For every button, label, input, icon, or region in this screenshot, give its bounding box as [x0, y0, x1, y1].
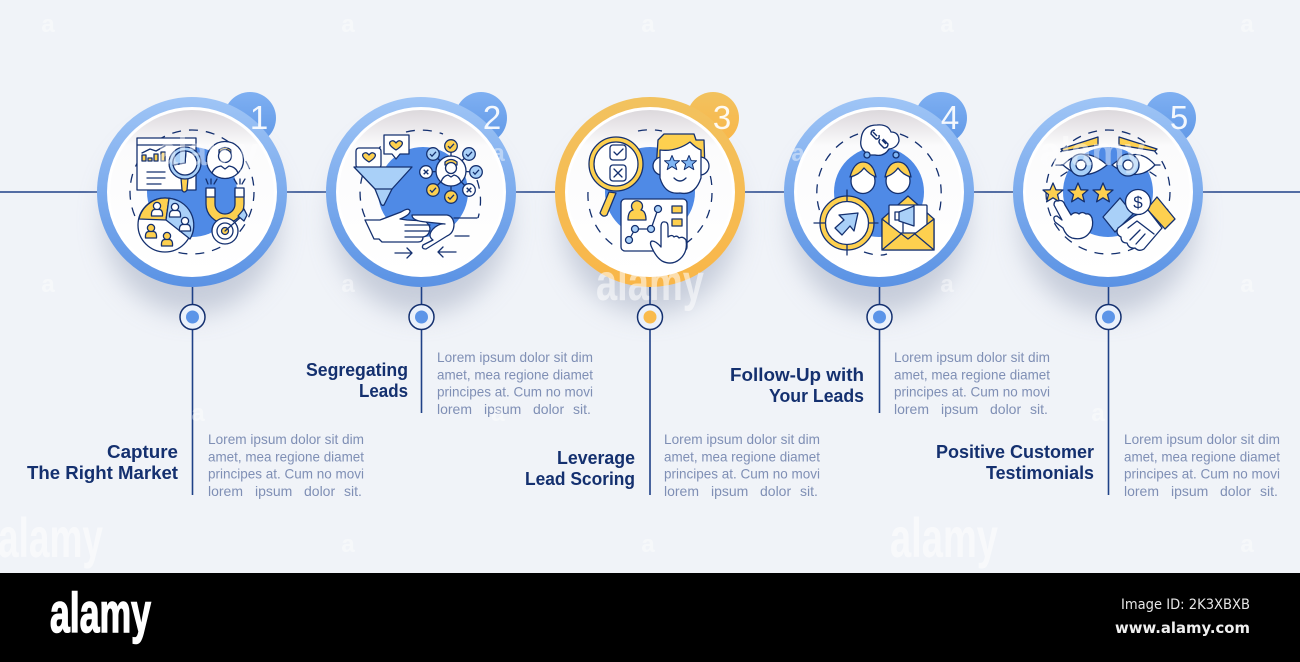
- number 1: 1: [250, 99, 268, 136]
- image id: Image ID: 2K3XBXB: [1121, 597, 1250, 613]
- text block: step 5: principes at. Cum no movi: [1124, 466, 1280, 482]
- heading: step 1: Capture: [107, 441, 178, 462]
- icon: lead scoring: [588, 130, 712, 263]
- watermarks: a: [1091, 400, 1105, 427]
- footer bar: [0, 573, 1300, 662]
- text block: step 1: lorem: [208, 483, 243, 499]
- watermarks: a: [1240, 271, 1254, 298]
- text block: step 4: ipsum: [941, 401, 978, 417]
- text block: step 5: amet, mea regione diamet: [1124, 448, 1280, 464]
- text block: step 5: [1124, 431, 1280, 499]
- panel: step 3 circle: [555, 92, 745, 314]
- heading: step 3: [525, 447, 635, 489]
- heading: step 4: Your Leads: [769, 385, 864, 406]
- text block: step 5: dolor: [1220, 483, 1251, 499]
- watermarks: a: [41, 11, 55, 38]
- heading: step 4: Follow-Up with: [730, 364, 864, 385]
- watermarks: alamy: [1040, 130, 1146, 174]
- text block: step 4: [894, 349, 1050, 417]
- watermarks: a: [41, 271, 55, 298]
- step 2 connector and node: [409, 287, 434, 413]
- heading: step 2: Leads: [359, 380, 408, 401]
- text block: step 2: dolor: [533, 401, 564, 417]
- text block: step 5: lorem: [1124, 483, 1159, 499]
- text block: step 3: [664, 431, 820, 499]
- watermarks: a: [491, 400, 505, 427]
- text block: step 3: sit.: [800, 483, 818, 499]
- watermarks: a: [341, 531, 355, 558]
- text block: step 5: ipsum: [1171, 483, 1208, 499]
- watermarks: a: [940, 271, 954, 298]
- text block: step 4: sit.: [1030, 401, 1048, 417]
- text block: step 2: Lorem ipsum dolor sit dim: [437, 349, 593, 365]
- heading: step 1: [27, 441, 178, 483]
- text block: step 2: ipsum: [484, 401, 521, 417]
- icon: market capture: [130, 130, 254, 254]
- text block: step 3: dolor: [760, 483, 791, 499]
- text block: step 3: lorem: [664, 483, 699, 499]
- watermarks: a: [940, 11, 954, 38]
- heading: step 3: Lead Scoring: [525, 468, 635, 489]
- panel: step 1 circle: [97, 92, 287, 314]
- number 4: 4: [941, 99, 959, 136]
- icon: follow-up: [814, 125, 941, 255]
- heading: step 4: [730, 364, 864, 406]
- text block: step 1: amet, mea regione diamet: [208, 448, 364, 464]
- watermarks: a: [1240, 531, 1254, 558]
- text block: step 3: ipsum: [711, 483, 748, 499]
- step 3 connector and node: [638, 287, 662, 495]
- watermarks: a: [641, 11, 655, 38]
- text block: step 3: Lorem ipsum dolor sit dim: [664, 431, 820, 447]
- step 5 connector and node: [1096, 287, 1121, 495]
- text block: step 1: Lorem ipsum dolor sit dim: [208, 431, 364, 447]
- panel: step 2 circle: [326, 92, 516, 314]
- watermarks: a: [341, 271, 355, 298]
- heading: step 2: Segregating: [306, 359, 408, 380]
- text block: step 4: principes at. Cum no movi: [894, 384, 1050, 400]
- icon: segregating leads: [354, 130, 482, 258]
- watermarks: alamy: [890, 506, 998, 569]
- text block: step 2: lorem: [437, 401, 472, 417]
- text block: step 5: Lorem ipsum dolor sit dim: [1124, 431, 1280, 447]
- text block: step 4: lorem: [894, 401, 929, 417]
- text block: step 4: dolor: [990, 401, 1021, 417]
- icon: testimonials: $: [1133, 193, 1143, 212]
- step 4 connector and node: [867, 287, 892, 413]
- number 3: 3: [713, 99, 731, 136]
- text block: step 3: amet, mea regione diamet: [664, 448, 820, 464]
- text block: step 2: principes at. Cum no movi: [437, 384, 593, 400]
- watermarks: a: [1240, 11, 1254, 38]
- timeline line: [0, 191, 1300, 193]
- watermarks: a: [791, 140, 805, 167]
- heading: step 5: [936, 441, 1094, 483]
- heading: step 3: Leverage: [557, 447, 635, 468]
- website: www.alamy.com: [1115, 619, 1250, 637]
- text block: step 1: [208, 431, 364, 499]
- icon: testimonials: [1043, 130, 1175, 254]
- text block: step 2: [437, 349, 593, 417]
- watermarks: alamy: [596, 254, 704, 312]
- text block: step 1: dolor: [304, 483, 335, 499]
- watermarks: a: [191, 400, 205, 427]
- text block: step 2: amet, mea regione diamet: [437, 366, 593, 382]
- text block: step 5: sit.: [1260, 483, 1278, 499]
- watermarks: a: [641, 531, 655, 558]
- heading: step 5: Testimonials: [986, 462, 1094, 483]
- watermarks: alamy: [158, 130, 259, 174]
- number 5: 5: [1170, 99, 1188, 136]
- alamy logo: alamy: [50, 581, 151, 644]
- step 1 connector and node: [180, 287, 205, 495]
- text block: step 1: principes at. Cum no movi: [208, 466, 364, 482]
- text block: step 2: sit.: [573, 401, 591, 417]
- heading: step 2: [306, 359, 408, 401]
- panel: step 4 circle: [784, 92, 974, 314]
- number 2: 2: [483, 99, 501, 136]
- watermarks: a: [491, 140, 505, 167]
- watermarks: a: [341, 11, 355, 38]
- text block: step 1: ipsum: [255, 483, 292, 499]
- watermarks: alamy: [0, 506, 103, 569]
- heading: step 5: Positive Customer: [936, 441, 1094, 462]
- text block: step 1: sit.: [344, 483, 362, 499]
- text block: step 4: Lorem ipsum dolor sit dim: [894, 349, 1050, 365]
- heading: step 1: The Right Market: [27, 462, 178, 483]
- text block: step 3: principes at. Cum no movi: [664, 466, 820, 482]
- panel: step 5 circle: [1013, 92, 1203, 314]
- text block: step 4: amet, mea regione diamet: [894, 366, 1050, 382]
